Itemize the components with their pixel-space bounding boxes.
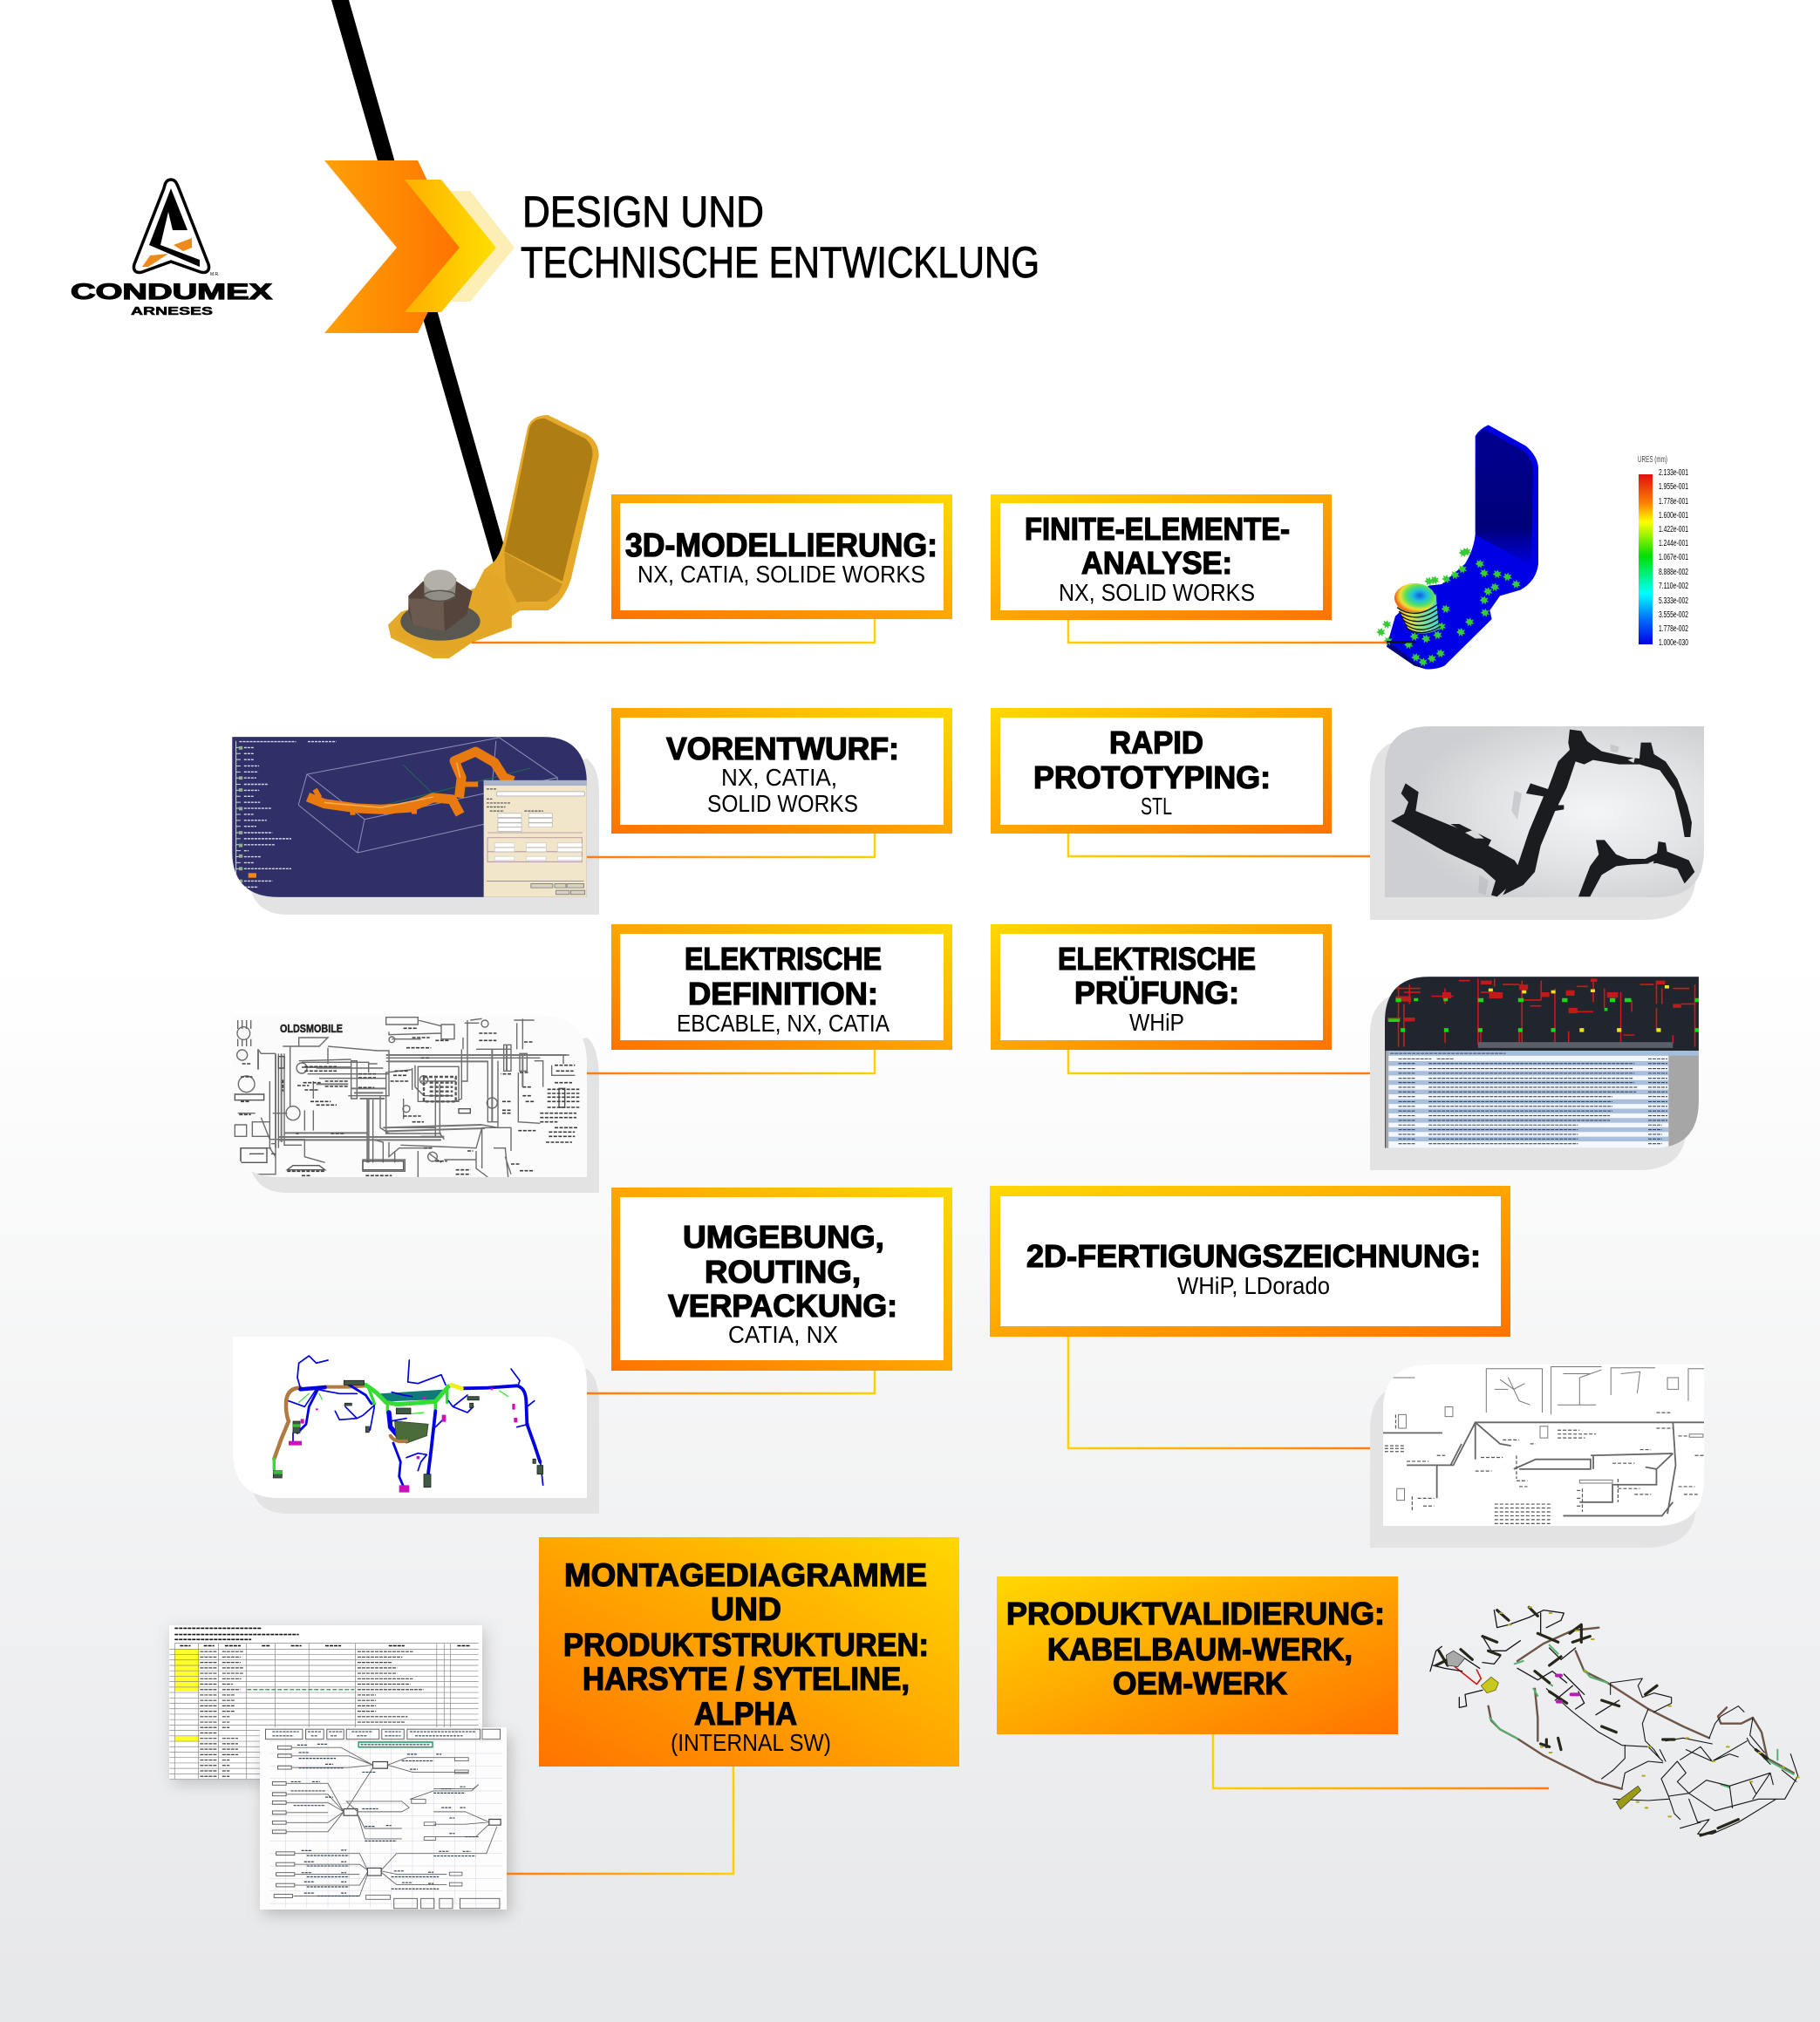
panel: Elektrische Definition: ELEKTRISCHE — [685, 941, 882, 977]
panel: Elektrische Definition — [611, 924, 952, 1050]
legend: displacement scale: 1.778e-001 — [1659, 497, 1688, 507]
image shadow: 2D-Fertigungszeichnung — [1370, 1386, 1696, 1548]
panel: 3D-Modellierung: NX, CATIA, SOLIDE WORKS — [637, 561, 925, 588]
image: 3D bracket with bolt — [388, 415, 599, 658]
panel: Finite-Elemente-Analyse: NX, SOLID WORKS — [1059, 579, 1255, 606]
panel: Vorentwurf — [611, 708, 952, 834]
panel: Umgebung, Routing, Verpackung: UMGEBUNG, — [683, 1219, 884, 1255]
panel: Vorentwurf: NX, CATIA, — [721, 764, 837, 791]
panel: Elektrische Definition: DEFINITION: — [688, 976, 878, 1011]
logo: Condumex Arneses: ARNESES — [131, 304, 213, 317]
panel: Rapid Prototyping: PROTOTYPING: — [1033, 759, 1271, 795]
legend: displacement scale: 1.778e-002 — [1659, 624, 1688, 634]
image: rapid prototype parts — [1385, 726, 1704, 897]
panel: Umgebung, Routing, Verpackung: CATIA, NX — [728, 1321, 838, 1348]
image shadow: Vorentwurf — [249, 759, 599, 915]
legend: displacement scale: 1.422e-001 — [1659, 525, 1688, 534]
panel: 3D-Modellierung: 3D-MODELLIERUNG: — [625, 528, 937, 564]
legend: displacement scale: 1.600e-001 — [1659, 511, 1688, 521]
panel: Finite-Elemente-Analyse — [991, 494, 1332, 620]
legend: displacement scale: 1.955e-001 — [1659, 482, 1688, 492]
panel: Umgebung, Routing, Verpackung: ROUTING, — [705, 1254, 861, 1290]
connector: Montagediagramme — [507, 1767, 733, 1874]
legend: displacement scale: 1.000e-030 — [1659, 638, 1688, 648]
panel: Umgebung, Routing, Verpackung — [611, 1188, 952, 1371]
panel: Finite-Elemente-Analyse: FINITE-ELEMENTE- — [1025, 511, 1290, 547]
connector: Rapid Prototyping — [1068, 834, 1385, 856]
image shadow: Elektrische Definition — [249, 1038, 599, 1193]
logo: Condumex Arneses: M.R. — [210, 272, 220, 277]
panel: Finite-Elemente-Analyse: ANALYSE: — [1081, 545, 1232, 581]
image: Vorentwurf CAD screenshot — [232, 737, 587, 897]
connector: 2D-Fertigungszeichnung — [1068, 1337, 1370, 1448]
legend: displacement scale: URES (mm) — [1638, 455, 1667, 465]
image: full vehicle wire harness — [1430, 1607, 1799, 1835]
legend: displacement scale: 1.067e-001 — [1659, 553, 1688, 562]
chevron arrow — [324, 160, 515, 333]
image: Oldsmobile wiring diagram: OLDSMOBILE — [280, 1022, 343, 1035]
connector: Produktvalidierung — [1213, 1734, 1549, 1788]
panel: 2D-Fertigungszeichnung — [990, 1186, 1510, 1337]
connector end: black tip on FEA model — [1387, 641, 1415, 643]
image: finite element model — [1376, 425, 1538, 669]
panel: Produktvalidierung: KABELBAUM-WERK, — [1047, 1631, 1353, 1667]
panel: Montagediagramme und Produktstrukturen — [539, 1537, 959, 1767]
image shadow: Umgebung — [250, 1369, 599, 1514]
panel: 3D-Modellierung — [611, 494, 952, 619]
panel: Montagediagramme und Produktstrukturen: PRODUKTSTRUKTUREN: — [563, 1627, 929, 1663]
panel: Rapid Prototyping — [991, 708, 1332, 834]
legend: displacement scale: 8.888e-002 — [1659, 568, 1688, 577]
title — [521, 187, 1040, 287]
panel: Montagediagramme und Produktstrukturen: ALPHA — [694, 1696, 797, 1732]
panel: Vorentwurf: SOLID WORKS — [707, 790, 858, 817]
panel: 2D-Fertigungszeichnung: WHiP, LDorado — [1177, 1272, 1330, 1299]
image shadow: Rapid Prototyping — [1370, 741, 1696, 920]
panel: Montagediagramme und Produktstrukturen: UND — [711, 1591, 781, 1627]
logo: Condumex Arneses — [71, 180, 273, 317]
legend: displacement scale: 7.110e-002 — [1659, 582, 1688, 591]
panel: Montagediagramme und Produktstrukturen: MONTAGEDIAGRAMME — [564, 1557, 927, 1593]
legend: displacement scale: 5.333e-002 — [1659, 596, 1688, 606]
panel: Montagediagramme und Produktstrukturen: (INTERNAL SW) — [671, 1729, 831, 1756]
connector: Elektrische Prüfung — [1068, 1050, 1370, 1073]
panel: Elektrische Prüfung: ELEKTRISCHE — [1058, 941, 1256, 977]
panel: Elektrische Prüfung — [991, 924, 1332, 1050]
panel: Vorentwurf: VORENTWURF: — [666, 731, 899, 766]
image: Oldsmobile wiring diagram — [232, 1016, 587, 1177]
title: TECHNISCHE ENTWICKLUNG — [521, 238, 1040, 287]
legend: displacement scale: 1.244e-001 — [1659, 539, 1688, 548]
panel: Elektrische Definition: EBCABLE, NX, CATIA — [677, 1010, 890, 1037]
panel: Umgebung, Routing, Verpackung: VERPACKUNG: — [668, 1288, 897, 1324]
image: assembly diagram sheet — [260, 1727, 509, 1914]
title: DESIGN UND — [522, 187, 764, 236]
image shadow: Elektrische Prüfung — [1370, 994, 1687, 1170]
panel: Rapid Prototyping: RAPID — [1109, 725, 1203, 760]
panel: 2D-Fertigungszeichnung: 2D-FERTIGUNGSZEICHNUNG: — [1026, 1238, 1481, 1274]
image: 2D manufacturing drawing — [1383, 1365, 1706, 1526]
connector: 3D-Modellierung — [472, 619, 875, 643]
diagonal black line — [331, 0, 508, 567]
image: 3D harness routing — [233, 1337, 587, 1498]
panel: Produktvalidierung — [997, 1576, 1398, 1734]
panel: Montagediagramme und Produktstrukturen: HARSYTE / SYTELINE, — [583, 1661, 910, 1697]
legend: displacement scale: 2.133e-001 — [1659, 468, 1688, 478]
image: electrical test software — [1383, 977, 1700, 1148]
connector: Elektrische Definition — [587, 1050, 875, 1073]
legend: displacement scale: 3.555e-002 — [1659, 610, 1688, 620]
panel: Elektrische Prüfung: PRÜFUNG: — [1074, 975, 1239, 1011]
panel: Elektrische Prüfung: WHiP — [1129, 1009, 1184, 1036]
connector: Umgebung — [587, 1371, 875, 1393]
connector: Vorentwurf — [587, 834, 875, 857]
panel: Produktvalidierung: OEM-WERK — [1113, 1665, 1287, 1701]
panel: Rapid Prototyping: STL — [1141, 793, 1172, 820]
logo: Condumex Arneses: CONDUMEX — [71, 280, 273, 304]
panel: Produktvalidierung: PRODUKTVALIDIERUNG: — [1006, 1596, 1385, 1631]
legend: displacement scale — [1638, 455, 1688, 648]
connector: Finite-Elemente-Analyse — [1068, 620, 1387, 643]
image: bill of material sheet — [169, 1625, 485, 1783]
